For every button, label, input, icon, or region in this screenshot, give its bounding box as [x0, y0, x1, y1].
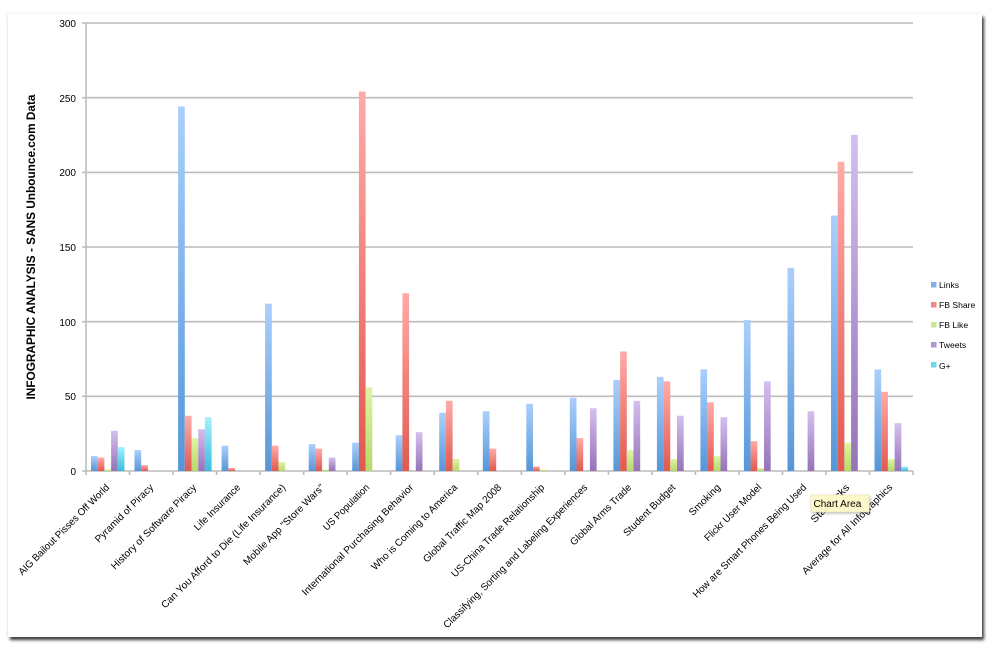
- bars: Starbucks: [831, 135, 858, 471]
- tooltip: Chart Area: Chart Area: [814, 499, 862, 510]
- bars: Classifying, Sorting and Labeling Experiences: [570, 398, 597, 471]
- bars: Global Arms Trade: [613, 351, 640, 471]
- legend: FB Like: [939, 320, 968, 330]
- category labels: Mobile App "Store Wars": [242, 482, 327, 568]
- bars: US-China Trade Relationship: [526, 404, 546, 471]
- category labels: [17, 482, 895, 631]
- legend: FB Share: [939, 300, 976, 310]
- bars: Who is Coming to America: [439, 401, 459, 471]
- bars: How are Smart Phones Being Used: [788, 268, 814, 471]
- bars: AIG Bailout Pisses Off World: [91, 431, 124, 471]
- y axis labels: 300: [59, 19, 76, 30]
- y axis labels: 250: [59, 94, 76, 105]
- bars: US Population: [352, 92, 372, 471]
- category labels: International Purchasing Behavior: [300, 482, 417, 598]
- category labels: How are Smart Phones Being Used: [691, 482, 809, 600]
- y axis title: INFOGRAPHIC ANALYSIS - SANS Unbounce.com Data: [24, 94, 38, 400]
- bars: Smoking: [700, 369, 727, 471]
- y axis labels: 0: [70, 467, 76, 478]
- legend: Tweets: [939, 340, 966, 350]
- category labels: Who is Coming to America: [370, 482, 460, 573]
- y axis labels: 150: [59, 243, 76, 254]
- bars: Average for All Infographics: [874, 369, 908, 471]
- category labels: Classifying, Sorting and Labeling Experiences: [442, 482, 590, 631]
- category labels: History of Software Piracy: [109, 482, 199, 572]
- legend: G+: [939, 361, 951, 371]
- category labels: Life Insurance: [192, 482, 243, 533]
- category labels: Smoking: [687, 482, 723, 518]
- legend: Links: [939, 280, 959, 290]
- category labels: Global Arms Trade: [568, 482, 634, 548]
- bars: Life Insurance: [222, 446, 235, 471]
- legend: [931, 280, 976, 371]
- y axis labels: [59, 19, 76, 478]
- category labels: Flickr User Model: [703, 482, 764, 544]
- bars: Pyramid of Piracy: [134, 450, 148, 471]
- bars: International Purchasing Behavior: [396, 293, 422, 471]
- y axis labels: 100: [59, 318, 76, 329]
- category labels: US Population: [321, 482, 372, 533]
- bars: Student Budget: [657, 377, 684, 471]
- category labels: Pyramid of Piracy: [93, 482, 156, 545]
- bars: Can You Afford to Die: [265, 304, 285, 471]
- category labels: Can You Afford to Die (Life Insurance): [159, 482, 288, 611]
- bars: Global Traffic Map 2008: [483, 411, 496, 471]
- y axis labels: 200: [59, 168, 76, 179]
- category labels: Student Budget: [622, 482, 678, 539]
- category labels: Starbucks: [809, 482, 852, 525]
- tooltip: Chart Area: [811, 495, 870, 513]
- y axis labels: 50: [65, 392, 76, 403]
- bars: Mobile App Store Wars: [309, 444, 336, 471]
- bars: Flickr User Model: [744, 320, 771, 471]
- category labels: Average for All Infographics: [800, 482, 895, 577]
- bars: History of Software Piracy: [178, 106, 212, 471]
- gridlines and axes: [82, 23, 913, 475]
- category labels: Global Traffic Map 2008: [421, 482, 504, 565]
- category labels: US-China Trade Relationship: [450, 482, 547, 580]
- category labels: AIG Bailout Pisses Off World: [17, 482, 112, 578]
